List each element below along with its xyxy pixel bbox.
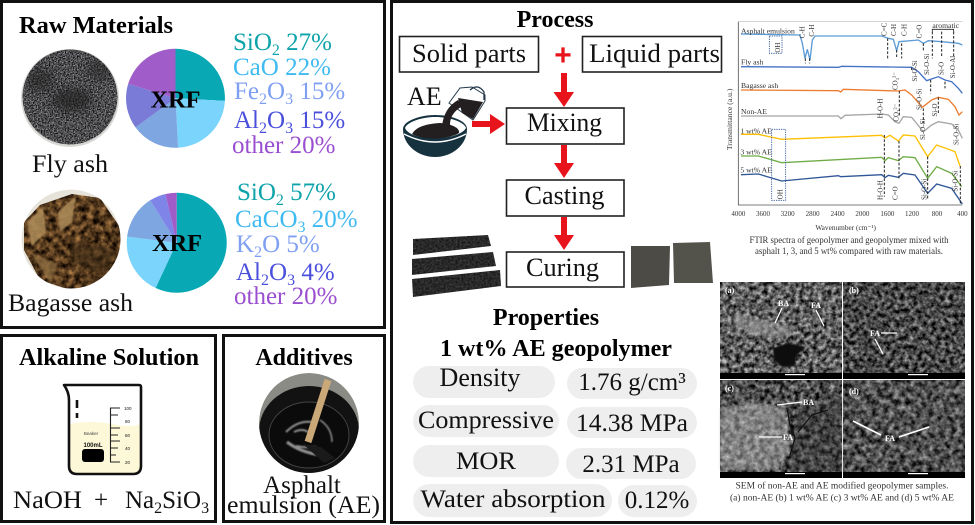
legend: fly ash oxides: Al	[234, 107, 259, 134]
icon: beaker: Beaker	[84, 431, 99, 436]
legend: bagasse ash oxides: 2	[254, 244, 262, 261]
box: curing: Curing	[526, 253, 599, 282]
property: MOR	[413, 445, 559, 477]
image: SEM c: FA	[783, 433, 793, 442]
x axis title: Wavenumber (cm⁻¹)	[815, 223, 877, 232]
legend: fly ash oxides: SiO	[233, 29, 272, 56]
peak labels: OH	[776, 189, 784, 199]
curve: 5 wt% AE	[741, 173, 962, 204]
icon: beaker: 100mL	[83, 443, 103, 449]
legend: fly ash oxides: Fe	[234, 78, 259, 105]
pie chart: fly ash XRF	[126, 49, 225, 148]
chart: FTIR spectra	[725, 21, 968, 232]
pie chart: bagasse ash XRF	[127, 193, 227, 293]
series labels: 3 wt% AE	[740, 148, 772, 157]
label: NaOH + Na2SiO3: +	[94, 487, 108, 514]
icon: beaker	[64, 385, 141, 474]
pie chart: bagasse ash XRF: XRF	[152, 231, 202, 257]
peak labels: C-H	[798, 26, 806, 38]
panel: process	[392, 2, 972, 522]
panel: alkaline solution	[2, 336, 216, 522]
peak labels: H-O-H	[877, 180, 885, 200]
series labels: 1 wt% AE	[740, 126, 772, 135]
caption: FTIR: FTIR spectra of geopolymer and geopolymer mixed with	[750, 235, 949, 246]
x axis ticks: 400	[957, 210, 968, 218]
icon: beaker: 80	[125, 419, 131, 424]
x axis ticks: 1200	[905, 210, 919, 218]
legend: bagasse ash oxides: Al	[236, 259, 261, 286]
arrow: to casting	[554, 145, 574, 178]
series labels: Non-AE	[741, 107, 767, 116]
caption: SEM	[730, 480, 954, 504]
box: solid parts: Solid parts	[412, 39, 526, 68]
image: SEM d: (d)	[849, 387, 859, 396]
legend: fly ash oxides: CaO 22%	[233, 54, 331, 81]
legend: fly ash oxides: 15%	[293, 78, 345, 105]
caption: FTIR: asphalt 1, 3, and 5 wt% compared with raw materials.	[755, 247, 943, 257]
peak labels: Si-O-Si	[920, 179, 928, 200]
value: water absorption	[618, 485, 697, 517]
icon: beaker: 100	[124, 406, 132, 411]
legend: bagasse ash oxides: 57%	[284, 179, 336, 206]
x axis ticks: 1600	[880, 210, 895, 218]
legend: fly ash oxides: 2	[259, 120, 267, 137]
value: water absorption: 0.12%	[625, 487, 689, 514]
peak labels: C=O	[892, 186, 900, 200]
curve: bagasse ash	[741, 89, 962, 115]
legend: bagasse ash oxides: 3	[298, 219, 306, 236]
heading: additives: Additives	[255, 345, 353, 371]
label: NaOH + Na2SiO3: NaOH	[13, 487, 82, 514]
legend: bagasse ash oxides	[234, 179, 358, 310]
legend: fly ash oxides: 2	[272, 42, 280, 59]
x axis ticks: 2000	[855, 210, 870, 218]
photo: asphalt emulsion bucket	[259, 373, 359, 476]
legend: fly ash oxides: O	[267, 78, 285, 105]
caption: FTIR	[750, 235, 949, 257]
x axis ticks: 3600	[756, 210, 770, 218]
peak labels: C-H	[890, 24, 898, 36]
value: density: 1.76 g/cm³	[578, 369, 686, 396]
y axis title: Transmittance (a.u.)	[725, 88, 734, 150]
photo: bagasse ash	[22, 190, 122, 290]
label: NaOH + Na2SiO3: 2	[154, 500, 162, 517]
caption: SEM: SEM of non-AE and AE modified geopolymer samples.	[736, 480, 948, 492]
icon: beaker: 40	[125, 446, 131, 451]
box: mixing: Mixing	[527, 108, 602, 137]
peak labels: C-H	[808, 25, 816, 37]
photo: geopolymer cubes	[631, 242, 713, 288]
label: bagasse ash: Bagasse ash	[8, 290, 134, 317]
peak labels: OH	[774, 43, 782, 53]
arrow: to mixing	[554, 73, 574, 107]
value: compressive: 14.38 MPa	[576, 410, 688, 437]
label: NaOH + Na2SiO3: 3	[201, 500, 209, 517]
curve: asphalt emulsion	[741, 34, 962, 60]
image: SEM a: (a)	[725, 286, 735, 295]
x axis ticks: 2400	[831, 210, 845, 218]
heading: alkaline solution: Alkaline Solution	[19, 345, 199, 371]
x axis ticks: 800	[932, 210, 943, 218]
legend: fly ash oxides: 3	[285, 120, 293, 137]
box: curing	[506, 252, 624, 287]
x axis ticks: 4000	[731, 210, 746, 218]
image: SEM c	[720, 380, 842, 478]
series labels: 5 wt% AE	[740, 166, 772, 175]
label: asphalt emulsion: Asphalt	[263, 472, 341, 499]
series labels	[740, 21, 960, 175]
photo: fly ash	[21, 49, 119, 147]
peak labels: Si-O-Si	[952, 124, 960, 145]
image: SEM d	[843, 380, 965, 478]
curve: fly ash	[741, 66, 962, 93]
peak labels: H-O-H	[877, 99, 885, 118]
label: NaOH + Na2SiO3: SiO	[162, 487, 201, 514]
panel: additives	[224, 336, 384, 522]
box: solid parts	[400, 36, 538, 72]
value: MOR: 2.31 MPa	[582, 451, 680, 478]
legend: fly ash oxides	[232, 29, 345, 159]
x axis ticks	[731, 210, 968, 218]
property: density: Density	[440, 363, 520, 392]
image: SEM b: FA	[870, 329, 880, 338]
image: SEM a	[720, 282, 842, 379]
legend: bagasse ash oxides: CaCO	[235, 206, 298, 233]
legend: bagasse ash oxides: K	[236, 231, 254, 258]
peak labels: C=O	[916, 25, 924, 38]
property: MOR: MOR	[456, 448, 516, 475]
arrow: to curing	[554, 217, 574, 250]
curve: non-AE	[741, 114, 962, 138]
property: density	[413, 363, 555, 398]
peak labels: Si-O	[931, 103, 939, 117]
image: SEM b: (b)	[849, 286, 859, 295]
legend: bagasse ash oxides: 3	[287, 272, 295, 289]
curve: 1 wt% AE	[741, 134, 960, 166]
image: SEM d: FA	[885, 434, 895, 443]
image: SEM b	[843, 282, 965, 379]
legend: fly ash oxides: 15%	[293, 107, 345, 134]
legend: bagasse ash oxides: O 5%	[262, 231, 320, 258]
peak labels: CO₃²⁻	[892, 103, 900, 122]
heading: 1 wt% AE geopolymer: 1 wt% AE geopolymer	[440, 336, 672, 362]
icon: pouring asphalt into bowl	[403, 87, 485, 157]
peak labels: Si-O-Si	[919, 119, 927, 140]
property: compressive: Compressive	[418, 407, 554, 434]
label: NaOH + Na2SiO3: Na	[125, 487, 154, 514]
peak labels: Si-O-Si	[916, 89, 924, 110]
label: asphalt emulsion: emulsion (AE)	[227, 492, 380, 519]
image: SEM c: (c)	[725, 384, 734, 393]
legend: bagasse ash oxides: other 20%	[234, 283, 337, 310]
image: SEM a: FA	[811, 301, 821, 310]
legend: fly ash oxides: 3	[285, 91, 293, 108]
series labels: aromatic	[932, 21, 960, 30]
peak labels: C=C	[881, 22, 889, 36]
peak labels: CO₃²⁻	[892, 72, 900, 90]
legend: bagasse ash oxides: 4%	[295, 259, 335, 286]
box: mixing	[506, 108, 624, 144]
legend: fly ash oxides: O	[267, 107, 285, 134]
curve: 3 wt% AE	[741, 156, 962, 187]
series labels: Fly ash	[741, 58, 764, 67]
property: water absorption: Water absorption	[420, 486, 606, 513]
series labels: Bagasse ash	[741, 81, 778, 90]
value: MOR	[566, 448, 696, 479]
legend: bagasse ash oxides: O	[269, 259, 287, 286]
legend: fly ash oxides: 27%	[280, 29, 332, 56]
series labels: Asphalt emulsion	[741, 26, 795, 35]
peak labels: C-H	[901, 24, 909, 36]
panel: raw materials	[2, 2, 384, 328]
label: fly ash: Fly ash	[32, 151, 109, 178]
peak labels: Si-O-Al	[949, 56, 957, 78]
legend: bagasse ash oxides: 2	[261, 272, 269, 289]
peak labels: Si-O-Si	[952, 170, 960, 192]
label: asphalt emulsion	[227, 472, 380, 519]
heading: process: Process	[517, 7, 593, 33]
legend: bagasse ash oxides: 2	[276, 192, 284, 209]
peak labels	[774, 22, 960, 200]
box: liquid parts: Liquid parts	[589, 39, 720, 68]
legend: fly ash oxides: other 20%	[232, 132, 335, 159]
peak labels: Si-O-Si	[911, 60, 919, 82]
legend: bagasse ash oxides: 20%	[306, 206, 358, 233]
x axis ticks: 2800	[806, 210, 820, 218]
peak labels: Si-O	[938, 62, 946, 75]
heading: raw materials: Raw Materials	[19, 13, 173, 39]
legend: bagasse ash oxides: SiO	[237, 179, 276, 206]
icon: beaker: 20	[125, 460, 131, 465]
heading: properties: Properties	[493, 305, 599, 331]
image: SEM c: BA	[803, 398, 814, 407]
caption: SEM: (a) non-AE (b) 1 wt% AE (c) 3 wt% AE and (d) 5 wt% AE	[730, 492, 954, 504]
box: casting	[506, 180, 624, 216]
icon: beaker: 60	[125, 433, 131, 438]
symbol: plus: +	[554, 39, 572, 72]
peak labels: Si-O-Si	[923, 54, 931, 75]
label: AE: AE	[407, 82, 442, 111]
x axis ticks: 3200	[781, 210, 795, 218]
arrow: AE to mixing	[472, 114, 505, 134]
label: NaOH + Na2SiO3	[13, 487, 209, 517]
image: SEM a: BA	[778, 299, 789, 308]
pie chart: fly ash XRF: XRF	[150, 88, 200, 114]
box: casting: Casting	[524, 181, 604, 210]
legend: fly ash oxides: 2	[259, 91, 267, 108]
photo: geopolymer bars	[412, 235, 501, 297]
